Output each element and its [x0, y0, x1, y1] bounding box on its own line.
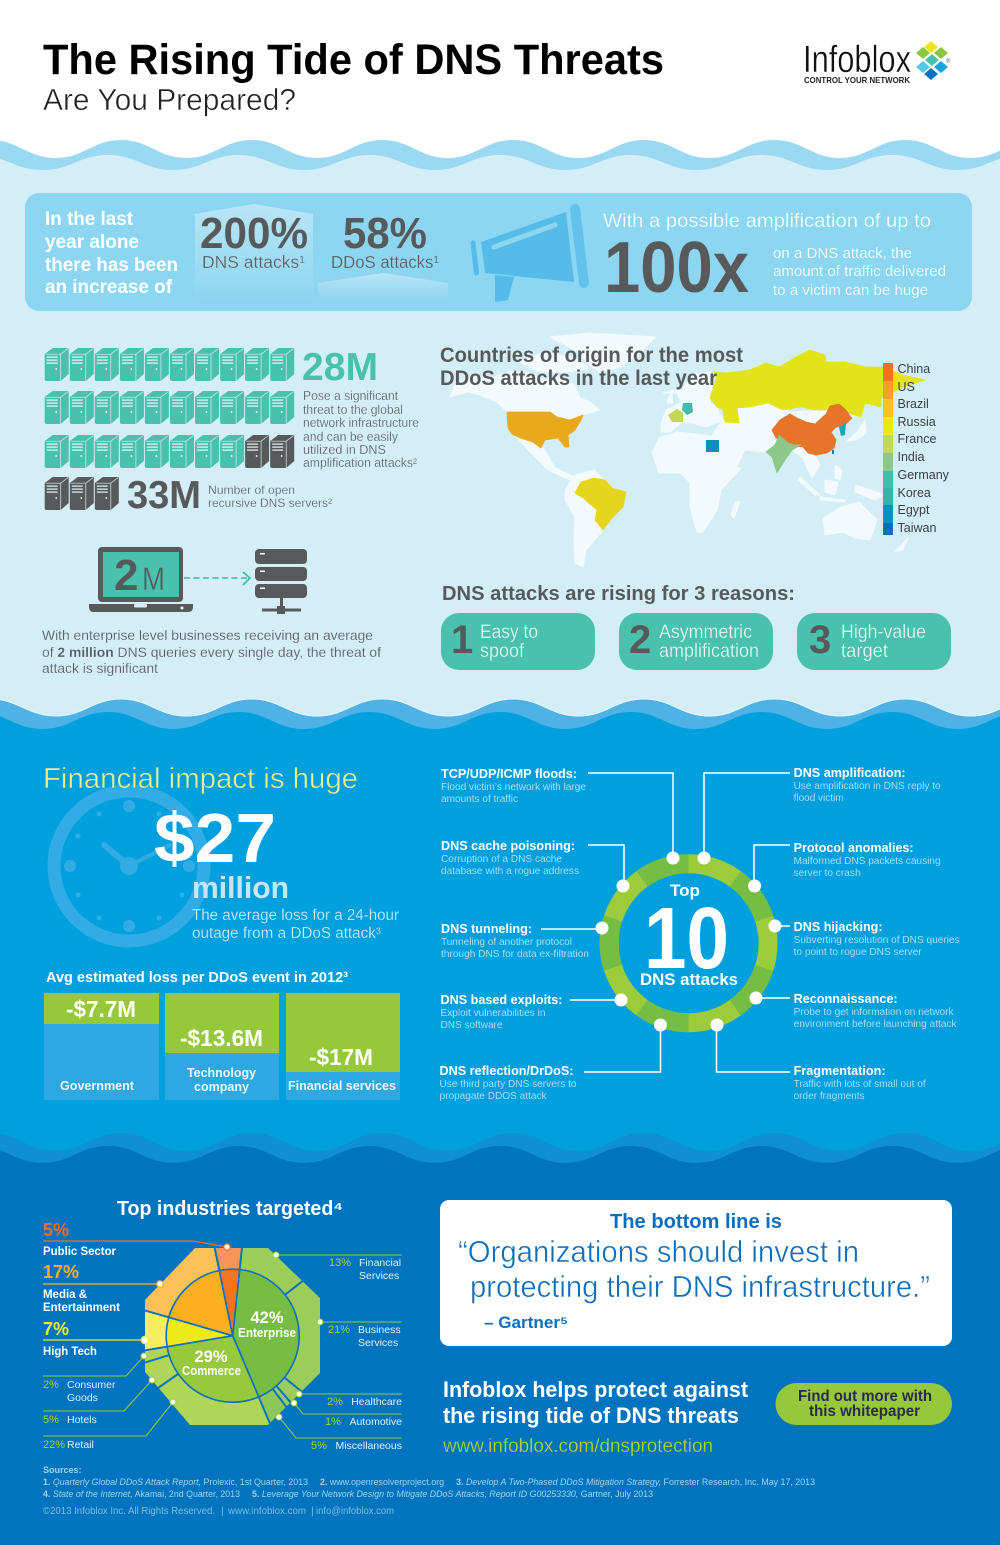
- label: Business Services 21%: [317, 1319, 402, 1349]
- text: 28M description: [303, 388, 419, 470]
- slice: Media: [169, 1270, 233, 1336]
- item: DNS cache poisoning: Corruption of a DNS cache: [441, 853, 562, 865]
- label: Consumer Goods 2%: 2%: [43, 1379, 59, 1391]
- icons: server row 3: [45, 435, 294, 468]
- text: amplification description: on a DNS attack, the: [773, 245, 912, 262]
- icon: clock: [54, 791, 204, 941]
- slice: Enterprise: [233, 1270, 299, 1397]
- item: DNS tunneling: Tunneling of another protocol: [441, 936, 572, 948]
- text: in the last year alone: an increase of: [45, 277, 173, 298]
- stat: $27 million: $27: [154, 799, 276, 877]
- label: Consumer Goods 2%: Consumer: [67, 1379, 116, 1391]
- item: DNS hijacking: [794, 919, 960, 958]
- item: Protocol anomalies: [794, 840, 941, 879]
- item: Protocol anomalies: server to crash: [794, 867, 861, 879]
- item: Protocol anomalies: Malformed DNS packets causing: [794, 855, 941, 867]
- icon: laptop showing 2M: 2: [114, 551, 138, 600]
- item: DNS based exploits: [440, 992, 562, 1031]
- label: Hotels 5%: Hotels: [67, 1414, 97, 1426]
- label: Miscellaneous 5%: [276, 1414, 402, 1452]
- text: sources: Sources:: [43, 1465, 82, 1475]
- title: The Rising Tide of DNS Threats: [43, 36, 664, 84]
- card: reason 3: High-value: [841, 622, 926, 643]
- text: average loss: The average loss for a 24-hour: [192, 907, 399, 924]
- heading: countries of origin: [440, 344, 743, 390]
- panel: bottom line quote: [440, 1200, 952, 1346]
- bar: Government: [44, 993, 159, 1100]
- legend: country ranking: France: [898, 432, 936, 446]
- legend: country ranking: Russia: [898, 415, 936, 429]
- legend: country ranking: Korea: [898, 486, 931, 500]
- label: Media and Entertainment 17%: Entertainment: [43, 1300, 120, 1314]
- bar: Technology company: -$13.6M: [180, 1025, 263, 1051]
- label: Retail 22%: Retail: [67, 1439, 94, 1451]
- text: in the last year alone: [45, 209, 178, 298]
- item: DNS based exploits: DNS software: [440, 1019, 503, 1031]
- legend: country ranking: India: [898, 450, 925, 464]
- label: Healthcare 2%: 2%: [327, 1396, 343, 1408]
- legend: country ranking: Germany: [898, 468, 950, 482]
- country: Brazil: [575, 478, 626, 530]
- legend: country ranking: [883, 362, 950, 535]
- label: Enterprise 42%: Enterprise: [238, 1326, 296, 1340]
- legend: country ranking: US: [898, 380, 915, 394]
- text: in the last year alone: In the last: [45, 209, 134, 230]
- text: amplification heading: With a possible amplification of up to: [603, 210, 931, 232]
- heading: 3 reasons: DNS attacks are rising for 3 reasons:: [442, 583, 795, 605]
- bar: 200 percent: [195, 204, 313, 300]
- text: sources: [43, 1465, 815, 1499]
- text: sources: 2. www.openresolverproject.org: [320, 1477, 444, 1487]
- item: TCP/UDP/ICMP floods: TCP/UDP/ICMP floods:: [441, 766, 577, 781]
- item: TCP/UDP/ICMP floods: Flood victim’s network with large: [441, 781, 586, 793]
- bar: 58 percent: [318, 273, 448, 300]
- item: DNS cache poisoning: DNS cache poisoning:: [441, 838, 575, 853]
- stat: 28M: 28M: [302, 346, 378, 389]
- ring centre title: Top: [670, 881, 700, 900]
- label: Financial Services 13%: 13%: [329, 1257, 351, 1269]
- text: in the last year alone: there has been: [45, 255, 178, 276]
- item: DNS amplification: flood victim: [794, 792, 844, 804]
- card: reason 1: spoof: [480, 641, 525, 662]
- label: Business Services 21%: Services: [358, 1337, 398, 1349]
- label: Business Services 21%: 21%: [328, 1324, 350, 1336]
- stat: $27 million: [154, 799, 289, 905]
- button: find out more: Find out more with: [798, 1388, 932, 1405]
- title: [43, 36, 664, 117]
- bar: Financial services: Financial services: [288, 1078, 396, 1093]
- label: Business Services 21%: Business: [358, 1324, 401, 1336]
- slice: Commerce: [167, 1336, 259, 1402]
- logo: Infoblox: Infoblox: [803, 39, 911, 81]
- item: DNS cache poisoning: [441, 838, 579, 877]
- logo: Infoblox: CONTROL YOUR NETWORK: [804, 75, 911, 85]
- label: Commerce 29%: 29%: [194, 1348, 228, 1366]
- stat: 58% DDoS attacks: [331, 209, 439, 272]
- icon: laptop showing 2M: M: [142, 561, 165, 597]
- label: High Tech 7%: High Tech: [43, 1344, 97, 1358]
- text: Infoblox call to action: the rising tide of DNS threats: [443, 1403, 739, 1428]
- label: Media and Entertainment 17%: Media &: [43, 1287, 87, 1301]
- chart: world map of DDoS origins: [450, 333, 925, 567]
- stat: 200% DNS attacks: DNS attacks¹: [202, 252, 305, 272]
- label: Media and Entertainment 17%: 17%: [43, 1262, 79, 1282]
- text: copyright: ©2013 Infoblox Inc. All Rights Reserved.: [43, 1505, 215, 1517]
- button: find out more: [776, 1383, 952, 1425]
- panel: bottom line quote: protecting their DNS infrastructure.”: [470, 1269, 930, 1304]
- bar: Technology company: company: [194, 1079, 250, 1094]
- item: Fragmentation: Fragmentation:: [794, 1063, 886, 1078]
- text: average loss: [192, 907, 399, 942]
- label: Media and Entertainment 17%: [43, 1262, 163, 1314]
- label: Automotive 1%: Automotive: [349, 1416, 402, 1428]
- heading: financial impact: Financial impact is huge: [43, 763, 358, 795]
- item: DNS tunneling: through DNS for data ex-filtration: [441, 948, 589, 960]
- band: section 1 light wave crest: [0, 140, 1000, 760]
- text: copyright: [43, 1505, 394, 1517]
- heading: top industries targeted: Top industries targeted⁴: [117, 1198, 343, 1220]
- stat: $27 million: million: [192, 870, 289, 905]
- text: enterprise DNS queries: [42, 627, 381, 676]
- label: Enterprise 42%: 42%: [250, 1309, 284, 1327]
- text: enterprise DNS queries: With enterprise level businesses receiving an average: [42, 627, 373, 643]
- label: Healthcare 2%: [296, 1391, 402, 1408]
- text: copyright: info@infoblox.com: [316, 1505, 394, 1517]
- card: reason 1: 1: [451, 618, 473, 662]
- label: Hotels 5%: 5%: [43, 1414, 59, 1426]
- country: Egypt: [706, 440, 719, 452]
- text: Infoblox call to action: Infoblox helps protect against: [443, 1377, 749, 1402]
- icon: DNS server stack: [255, 549, 307, 614]
- card: reason 2: [619, 613, 773, 670]
- chart: industries pie in octagon: [145, 1248, 320, 1425]
- panel: bottom line quote: The bottom line is: [610, 1211, 782, 1233]
- card: reason 1: [441, 613, 595, 670]
- button: find out more: this whitepaper: [809, 1403, 920, 1420]
- panel: bottom line quote: “Organizations should invest in: [458, 1234, 859, 1269]
- item: Reconnaissance: [794, 991, 957, 1030]
- text: sources: 1. Quarterly Global DDoS Attack Report, Prolexic, 1st Quarter, 2013: [43, 1477, 308, 1487]
- label: Automotive 1%: [291, 1400, 402, 1428]
- text: 28M description: network infrastructure: [303, 415, 419, 430]
- text: 28M description: and can be easily: [303, 429, 398, 444]
- label: High Tech 7%: [43, 1319, 149, 1358]
- label: Miscellaneous 5%: 5%: [311, 1440, 327, 1452]
- item: DNS amplification: [794, 765, 941, 804]
- item: DNS amplification: DNS amplification:: [794, 765, 906, 780]
- ring nodes: [596, 852, 782, 1032]
- legend: country ranking: Taiwan: [898, 521, 936, 535]
- band: section 2 wave crest: [0, 699, 1000, 1200]
- item: Protocol anomalies: Protocol anomalies:: [794, 840, 914, 855]
- card: reason 3: target: [841, 641, 889, 662]
- icons: server row 2: [45, 391, 294, 424]
- label: Public Sector 5%: [43, 1220, 230, 1258]
- item: DNS amplification: Use amplification in DNS reply to: [794, 780, 941, 792]
- item: DNS based exploits: Exploit vulnerabilities in: [440, 1007, 546, 1019]
- bar: Government: -$7.7M: [66, 996, 136, 1022]
- stat: 58% DDoS attacks: DDoS attacks¹: [331, 252, 439, 272]
- item: Reconnaissance: environment before launching attack: [794, 1018, 957, 1030]
- text: 33M description: recursive DNS servers²: [208, 496, 332, 510]
- text: copyright: |: [311, 1505, 314, 1517]
- country: Germany: [682, 403, 693, 415]
- item: Reconnaissance: Reconnaissance:: [794, 991, 898, 1006]
- text: 28M description: utilized in DNS: [303, 442, 386, 457]
- item: Fragmentation: order fragments: [794, 1090, 865, 1102]
- label: Consumer Goods 2%: Goods: [67, 1392, 98, 1404]
- ring centre title: DNS attacks: [640, 970, 738, 989]
- item: DNS hijacking: Subverting resolution of DNS queries: [794, 934, 960, 946]
- text: average loss: outage from a DDoS attack³: [192, 925, 381, 942]
- country: Russia: [710, 350, 925, 423]
- panel: bottom line quote: – Gartner⁵: [484, 1313, 568, 1332]
- item: DNS tunneling: DNS tunneling:: [441, 921, 532, 936]
- text: amplification description: amount of traffic delivered: [773, 263, 946, 280]
- icon: laptop showing 2M: [89, 547, 193, 612]
- item: DNS reflection/DrDoS: Use third party DNS servers to: [440, 1078, 577, 1090]
- label: Public Sector 5%: 5%: [43, 1220, 69, 1240]
- text: sources: 5. Leverage Your Network Design to Mitigate DDoS Attacks, Report ID G00253330, Gartner, July 2013: [252, 1489, 653, 1499]
- item: TCP/UDP/ICMP floods: [441, 766, 586, 805]
- connector lines: [541, 773, 790, 1072]
- card: reason 2: 2: [629, 618, 651, 662]
- heading: countries of origin: Countries of origin for the most: [440, 344, 743, 367]
- item: Fragmentation: [794, 1063, 926, 1102]
- legend: country ranking: Brazil: [898, 397, 929, 411]
- country: Korea: [839, 423, 846, 436]
- card: reason 2: amplification: [659, 641, 759, 662]
- icons: server row 1: [45, 348, 294, 381]
- bar: Technology company: [165, 993, 279, 1100]
- country: Taiwan: [832, 450, 834, 454]
- label: Consumer Goods 2%: [43, 1353, 147, 1404]
- item: DNS reflection/DrDoS: [440, 1063, 577, 1102]
- text: 28M description: Pose a significant: [303, 388, 398, 403]
- stat: 200% DNS attacks: 200%: [200, 209, 308, 258]
- legend: country ranking: China: [898, 362, 930, 376]
- text: 33M description: Number of open: [208, 483, 295, 497]
- text: sources: 3. Develop A Two-Phased DDoS Mitigation Strategy, Forrester Research, Inc. May 17, 2013: [456, 1477, 815, 1487]
- text: copyright: www.infoblox.com: [227, 1505, 306, 1517]
- slice: Public Sector: [219, 1269, 240, 1336]
- label: Healthcare 2%: Healthcare: [351, 1396, 402, 1408]
- text: amplification description: [773, 245, 946, 299]
- item: TCP/UDP/ICMP floods: amounts of traffic: [441, 793, 518, 805]
- label: High Tech 7%: 7%: [43, 1319, 69, 1339]
- item: DNS reflection/DrDoS: propagate DDOS attack: [440, 1090, 547, 1102]
- ring centre title: 10: [644, 890, 729, 987]
- stat: 33M: 33M: [127, 474, 201, 517]
- label: Financial Services 13%: Services: [359, 1270, 399, 1282]
- item: DNS hijacking: DNS hijacking:: [794, 919, 883, 934]
- label: Miscellaneous 5%: Miscellaneous: [335, 1440, 402, 1452]
- item: DNS reflection/DrDoS: DNS reflection/DrDoS:: [440, 1063, 574, 1078]
- chart: top 10 DNS attacks ring: [541, 773, 790, 1072]
- item: DNS based exploits: DNS based exploits:: [440, 992, 562, 1007]
- label: Automotive 1%: 1%: [325, 1416, 341, 1428]
- label: Enterprise 42%: [238, 1309, 296, 1340]
- label: Commerce 29%: Commerce: [182, 1364, 241, 1378]
- text: 33M description: [208, 483, 332, 510]
- item: DNS cache poisoning: database with a rogue address: [441, 865, 579, 877]
- text: copyright: |: [221, 1505, 224, 1517]
- item: Reconnaissance: Probe to get information on network: [794, 1006, 954, 1018]
- item: Fragmentation: Traffic with lots of small out of: [794, 1078, 926, 1090]
- label: Retail 22%: 22%: [43, 1439, 65, 1451]
- bar: Government: Government: [60, 1078, 135, 1093]
- item: DNS hijacking: to point to rogue DNS server: [794, 946, 922, 958]
- country: France: [668, 409, 683, 422]
- text: Infoblox call to action: www.infoblox.com/dnsprotection: [442, 1435, 713, 1457]
- heading: countries of origin: DDoS attacks in the last year: [440, 367, 717, 390]
- label: Hotels 5%: [43, 1377, 155, 1426]
- text: amplification description: to a victim can be huge: [773, 282, 928, 299]
- legend: country ranking: Egypt: [898, 503, 930, 517]
- text: 28M description: threat to the global: [303, 402, 403, 417]
- title: Are You Prepared?: [43, 82, 296, 117]
- panel: pale blue section background: [0, 155, 1000, 760]
- panel: dark blue section background: [0, 1146, 1000, 1545]
- text: 28M description: amplification attacks²: [303, 455, 418, 470]
- label: Retail 22%: [43, 1399, 176, 1451]
- bar: Financial services: -$17M: [309, 1044, 373, 1070]
- bar: Technology company: Technology: [187, 1065, 257, 1080]
- icons: server row 4: [45, 477, 119, 510]
- label: Public Sector 5%: Public Sector: [43, 1244, 116, 1258]
- arrow: queries to server: [184, 572, 250, 585]
- card: reason 3: 3: [809, 618, 831, 662]
- text: enterprise DNS queries: attack is significant: [42, 660, 158, 676]
- bar: Financial services: [286, 993, 400, 1100]
- label: Commerce 29%: [182, 1348, 241, 1378]
- label: Financial Services 13%: Financial: [359, 1257, 401, 1269]
- country: India: [766, 435, 801, 473]
- band: section 3 wave crest: [0, 1133, 1000, 1545]
- text: in the last year alone: year alone: [45, 232, 139, 253]
- icon: megaphone: [473, 209, 584, 302]
- country: China: [772, 404, 852, 455]
- label: Financial Services 13%: [273, 1252, 402, 1282]
- country: US: [507, 412, 583, 448]
- text: enterprise DNS queries: of 2 million DNS queries every single day, the threat of: [42, 644, 381, 660]
- stat: 58% DDoS attacks: 58%: [343, 209, 427, 258]
- card: reason 1: Easy to: [480, 622, 538, 643]
- card: reason 3: [797, 613, 951, 670]
- panel: statistics banner: [25, 193, 972, 311]
- text: sources: 4. State of the Internet, Akamai, 2nd Quarter, 2013: [43, 1489, 240, 1499]
- slice: High Tech: [166, 1317, 233, 1347]
- stat: 100x: 100x: [604, 228, 749, 308]
- card: reason 2: Asymmetric: [659, 622, 752, 643]
- panel: mid blue section background: [0, 712, 1000, 1200]
- item: DNS tunneling: [441, 921, 589, 960]
- heading: avg estimated loss: Avg estimated loss per DDoS event in 2012³: [46, 970, 348, 986]
- text: Infoblox call to action: [442, 1377, 749, 1457]
- logo: Infoblox: ®: [946, 58, 951, 65]
